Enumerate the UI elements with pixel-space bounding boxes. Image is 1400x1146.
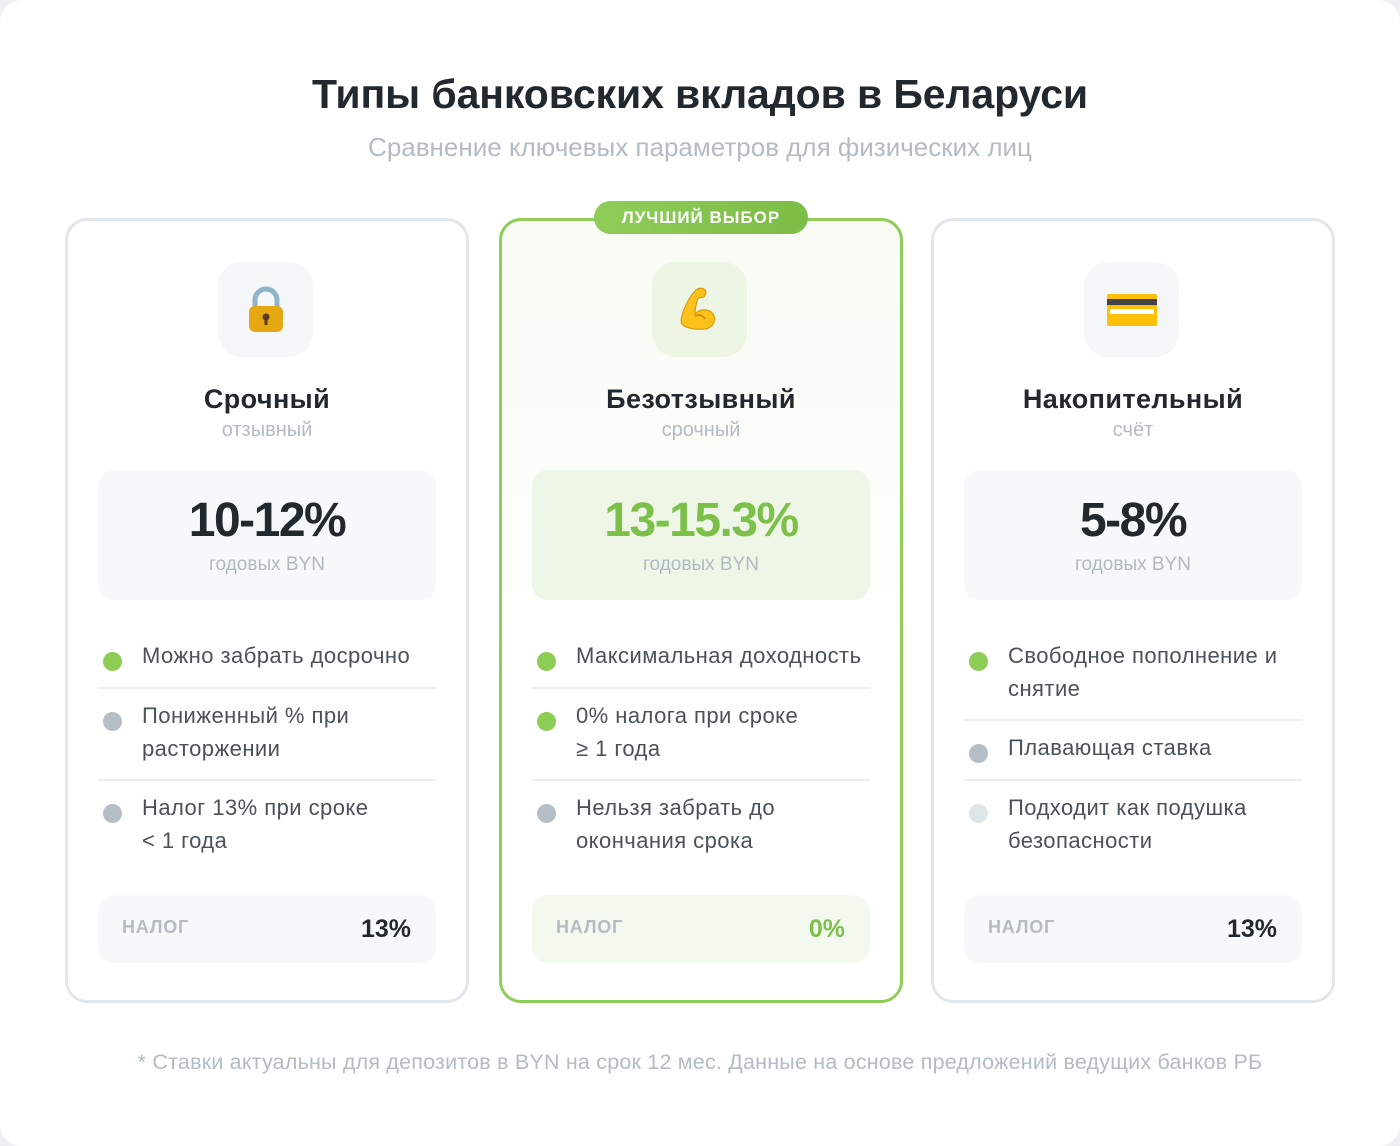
panel: Срочный: отзывный (222, 419, 312, 441)
subtitle: Сравнение ключевых параметров для физических лиц (368, 132, 1032, 162)
panel: Накопительный: счёт (1113, 419, 1153, 441)
footnote: * Ставки актуальны для депозитов в BYN на срок 12 мес. Данные на основе предложений ведущих банков РБ (138, 1050, 1262, 1074)
tax box: НАЛОГ (556, 917, 623, 937)
rate box (98, 470, 436, 600)
icon: lock (218, 262, 313, 357)
tax box: 13% (361, 915, 411, 943)
panel: Срочный (65, 218, 469, 1003)
title: Типы банковских вкладов в Беларуси (312, 71, 1088, 117)
rate box: 13-15.3% (604, 494, 798, 547)
panel: Безотзывный: 0% налога при сроке (576, 703, 798, 728)
rate box: 10-12% (189, 494, 345, 547)
badge (594, 201, 808, 234)
rate box (964, 470, 1302, 600)
tax box (964, 895, 1302, 963)
rate box: 5-8% (1080, 494, 1186, 547)
feature list (98, 643, 436, 853)
panel: Безотзывный: срочный (662, 419, 740, 441)
panel: Накопительный: Плавающая ставка (1008, 735, 1212, 760)
rate box (532, 470, 870, 600)
panel: Накопительный (931, 218, 1335, 1003)
panel: Безотзывный: Нельзя забрать до (576, 795, 775, 820)
panel: Накопительный: Свободное пополнение и (1008, 643, 1278, 668)
tax box: 0% (809, 915, 845, 943)
heading: Срочный (204, 384, 330, 414)
tax box (98, 895, 436, 963)
rate box: годовых BYN (1075, 554, 1191, 575)
badge: ЛУЧШИЙ ВЫБОР (622, 208, 780, 227)
panel: Безотзывный (499, 218, 903, 1003)
heading: Безотзывный (606, 384, 796, 414)
panel: Срочный: < 1 года (142, 828, 227, 853)
panel: Срочный: расторжении (142, 736, 280, 761)
feature list (532, 643, 870, 853)
panel: Безотзывный: окончания срока (576, 828, 753, 853)
panel: Срочный: Налог 13% при сроке (142, 795, 368, 820)
tax box: НАЛОГ (122, 917, 189, 937)
tax box: 13% (1227, 915, 1277, 943)
rate box: годовых BYN (643, 554, 759, 575)
icon: credit card (1084, 262, 1179, 357)
rate box: годовых BYN (209, 554, 325, 575)
heading: Накопительный (1023, 384, 1243, 414)
icon: flexed biceps (652, 262, 747, 357)
feature list (964, 643, 1302, 853)
tax box: НАЛОГ (988, 917, 1055, 937)
panel: Безотзывный: ≥ 1 года (576, 736, 660, 761)
panel: Накопительный: безопасности (1008, 828, 1152, 853)
panel: Срочный: Можно забрать досрочно (142, 643, 410, 668)
tax box (532, 895, 870, 963)
panel: Срочный: Пониженный % при (142, 703, 349, 728)
panel: Накопительный: снятие (1008, 676, 1080, 701)
panel: Накопительный: Подходит как подушка (1008, 795, 1247, 820)
panel: Безотзывный: Максимальная доходность (576, 643, 861, 668)
